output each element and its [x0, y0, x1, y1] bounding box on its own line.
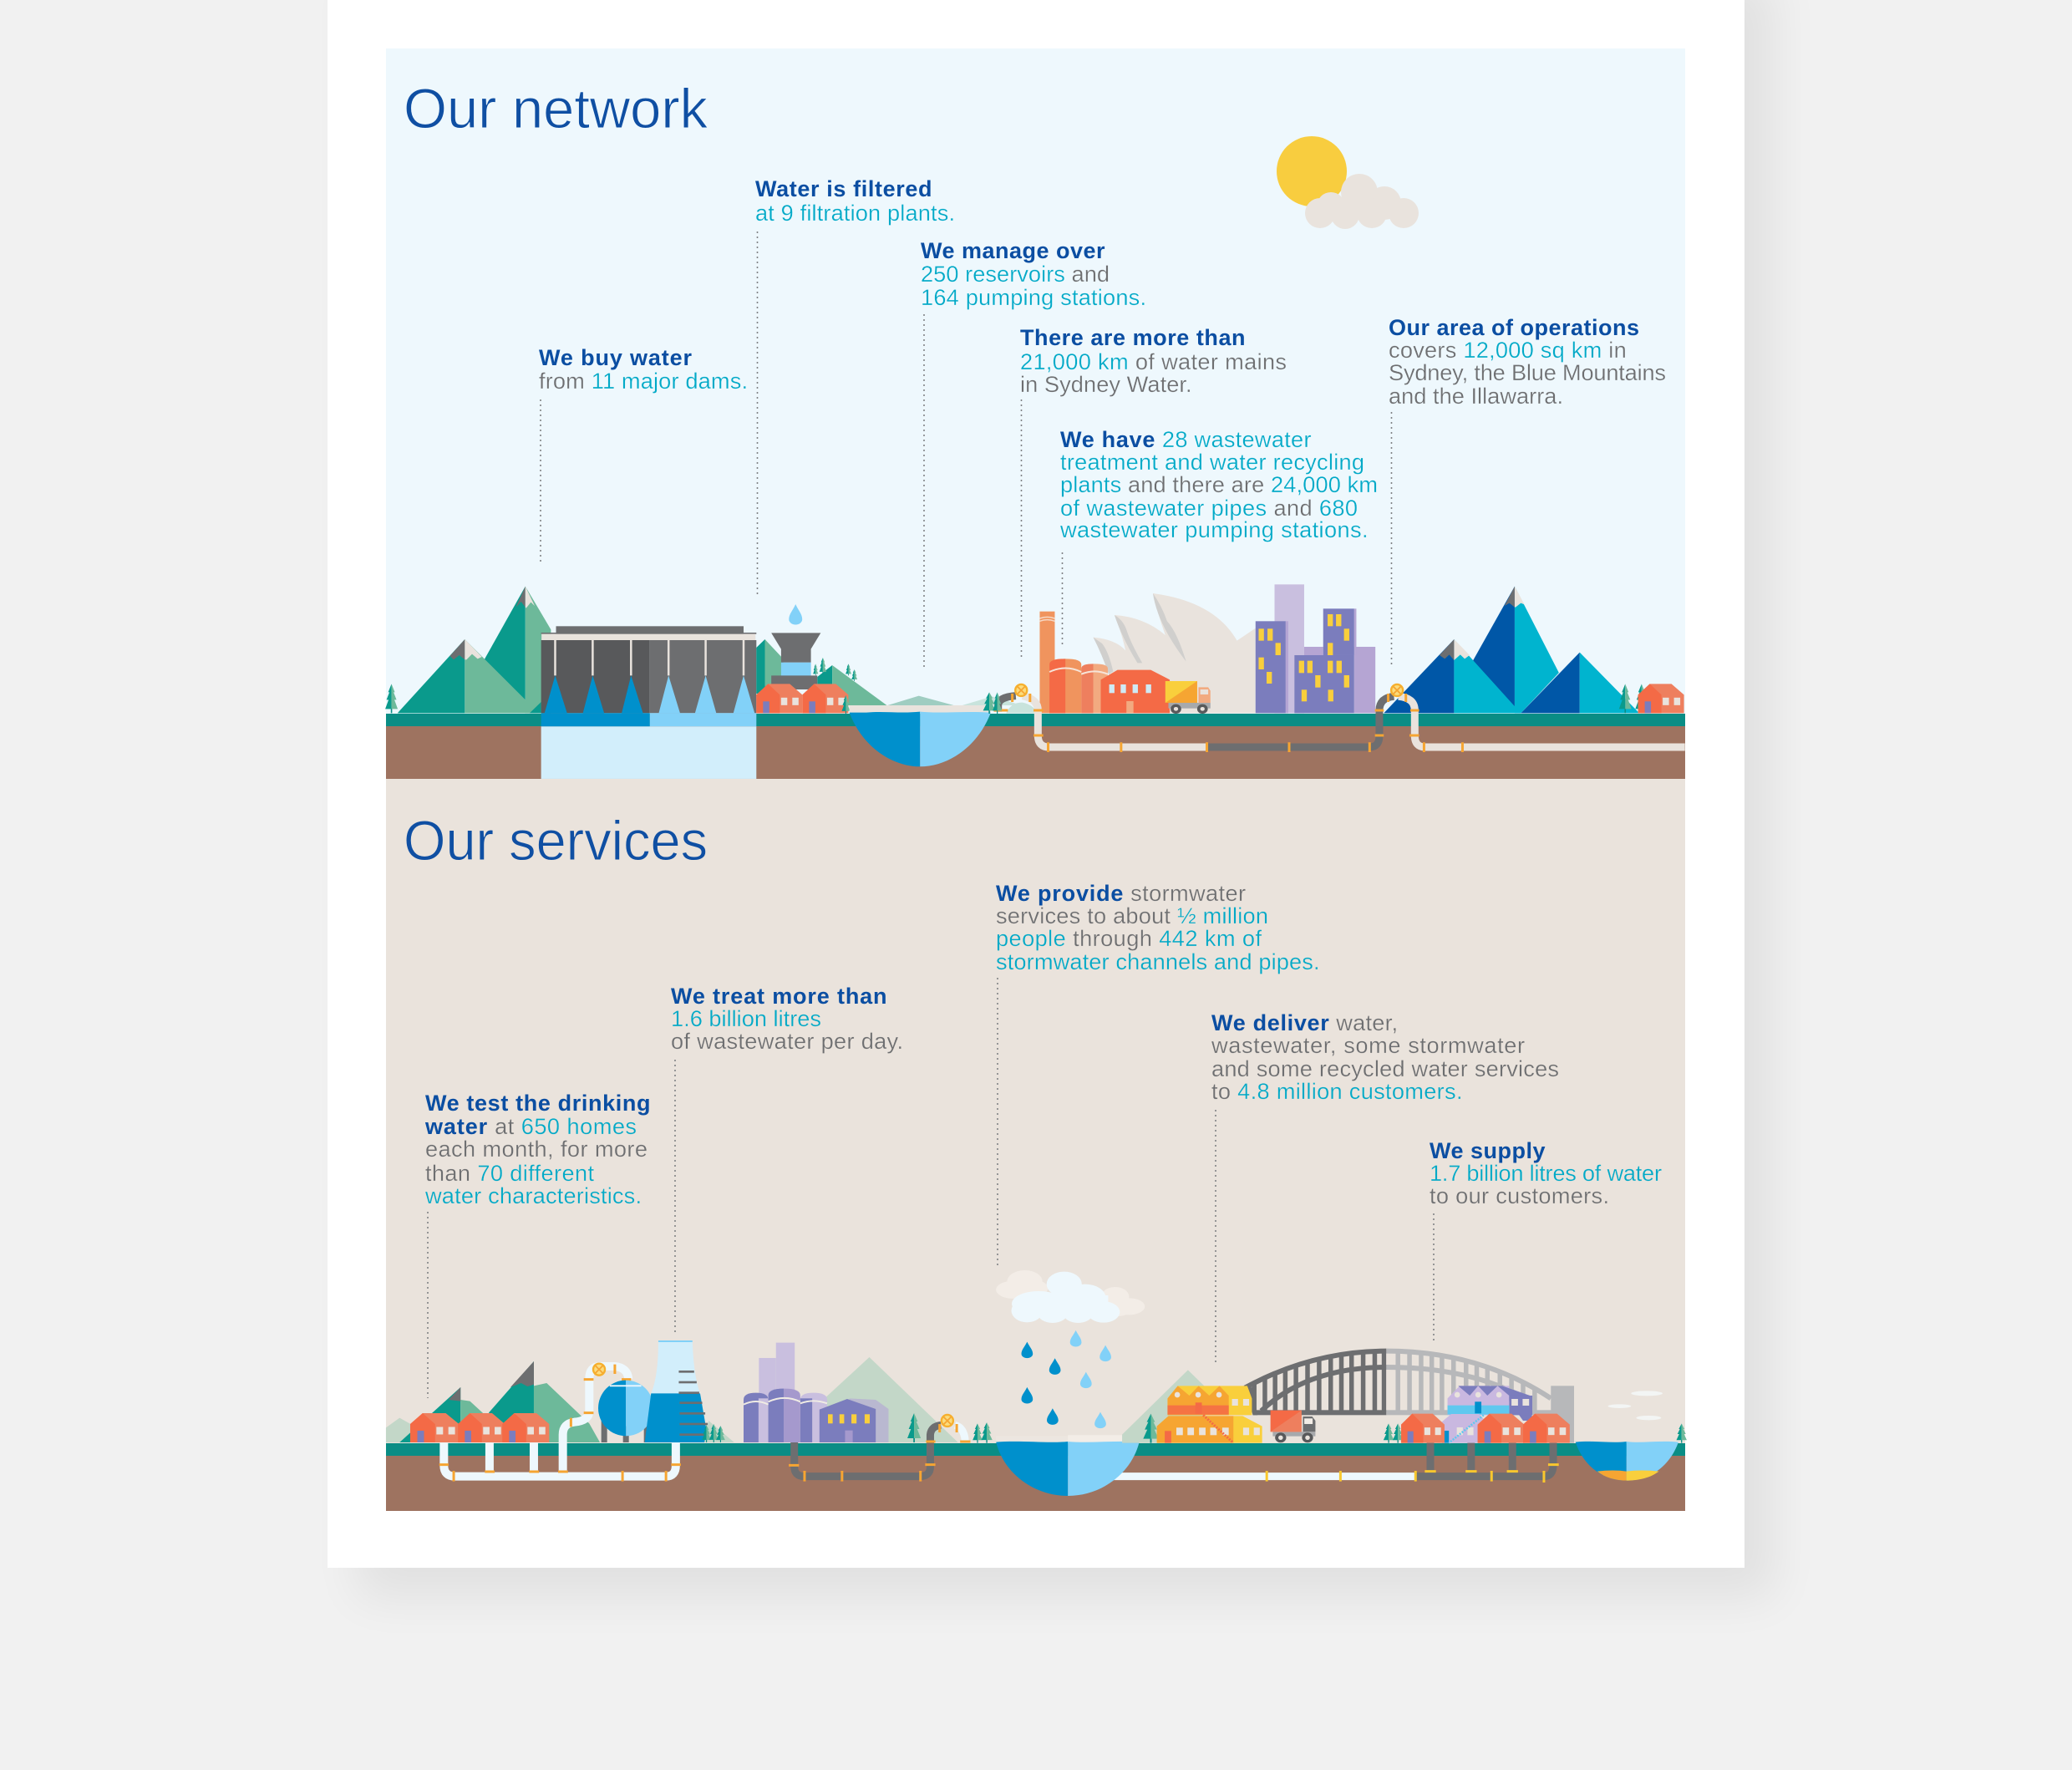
- text: we test: each month, for more: [425, 1136, 648, 1162]
- text: we deliver: to 4.8 million customers.: [1211, 1078, 1462, 1104]
- pipes: supply: [1267, 1443, 1559, 1483]
- ground: network: [386, 714, 1685, 779]
- leader: we test: [427, 1212, 429, 1398]
- leader: we treat: [674, 1060, 676, 1335]
- red truck: [1271, 1411, 1315, 1442]
- text: we deliver: We deliver water,: [1211, 1010, 1398, 1035]
- text: wastewater: of wastewater pipes and 680: [1060, 495, 1358, 521]
- text: we test: We test the drinking: [425, 1091, 651, 1116]
- text: we supply: 1.7 billion litres of water: [1430, 1160, 1662, 1186]
- text: wastewater: [1059, 426, 1378, 542]
- yellow terraces: [1157, 1386, 1262, 1443]
- text: we treat: of wastewater per day.: [671, 1028, 903, 1054]
- text: water mains: [1020, 325, 1287, 397]
- ground: services: [386, 1443, 1685, 1511]
- text: we treat: [671, 984, 903, 1054]
- text: water is filtered: at 9 filtration plants.: [755, 200, 955, 226]
- text: we treat: We treat more than: [671, 984, 887, 1009]
- text: area of operations: Our area of operations: [1389, 315, 1639, 340]
- text: we provide: services to about ½ million: [996, 903, 1268, 928]
- panel: our network: [385, 48, 1685, 779]
- text: we manage over: [921, 238, 1146, 310]
- text: we manage over: We manage over: [921, 238, 1105, 263]
- leader: we provide: [997, 978, 998, 1266]
- scene: dam and filtration (left half): [385, 587, 1022, 779]
- buildings: [1256, 584, 1375, 713]
- text: water is filtered: [755, 176, 955, 226]
- text: wastewater: treatment and water recycling: [1060, 449, 1364, 475]
- text: water mains: 21,000 km of water mains: [1020, 348, 1287, 374]
- text: area of operations: covers 12,000 sq km in: [1389, 337, 1627, 363]
- text: we test: water characteristics.: [424, 1183, 642, 1208]
- text: we supply: We supply: [1430, 1138, 1546, 1163]
- leader: we deliver: [1215, 1110, 1216, 1366]
- text: we manage over: 250 reservoirs and: [921, 261, 1110, 287]
- text: we deliver: and some recycled water services: [1211, 1055, 1559, 1081]
- leader: we buy water: [540, 399, 541, 564]
- leader: wastewater: [1061, 552, 1063, 648]
- clouds: distant: [1608, 1391, 1663, 1420]
- text: we provide: stormwater channels and pipes.: [996, 949, 1320, 974]
- leader: we manage over: [923, 314, 925, 670]
- text: we buy water: [539, 345, 748, 394]
- text: wastewater: wastewater pumping stations.: [1059, 516, 1369, 542]
- pale mountain: [1122, 1370, 1206, 1443]
- opera house: [1094, 593, 1256, 713]
- stormwater reservoir: [973, 1422, 1140, 1496]
- text: we provide: We provide stormwater: [996, 880, 1246, 906]
- purple treatment plant: [744, 1343, 958, 1442]
- text: water mains: There are more than: [1020, 325, 1246, 350]
- text: area of operations: Sydney, the Blue Mountains: [1389, 359, 1666, 385]
- homes: [1384, 1386, 1570, 1443]
- pipes: wastewater: [789, 1413, 970, 1482]
- text: we test: water at 650 homes: [424, 1113, 637, 1139]
- heading: our services: Our services: [404, 811, 708, 872]
- text: area of operations: and the Illawarra.: [1389, 383, 1563, 409]
- mountains: blue: [1384, 587, 1684, 713]
- tank: [598, 1381, 653, 1442]
- text: we supply: to our customers.: [1430, 1183, 1609, 1208]
- icon: valve: [942, 1415, 953, 1427]
- filtration tower: [756, 604, 886, 714]
- text: we test: than 70 different: [425, 1160, 594, 1186]
- text: we test: [424, 1091, 651, 1208]
- reservoir: [850, 696, 1022, 766]
- text: we manage over: 164 pumping stations.: [921, 284, 1146, 310]
- text: wastewater: We have 28 wastewater: [1060, 426, 1312, 452]
- panel: our services: [386, 779, 1687, 1511]
- rain cloud: [996, 1270, 1145, 1323]
- leader: we supply: [1433, 1213, 1435, 1341]
- heading: our network: Our network: [404, 79, 708, 140]
- text: wastewater: plants and there are 24,000 km: [1060, 471, 1378, 497]
- text: water is filtered: Water is filtered: [755, 176, 932, 201]
- text: we provide: [996, 880, 1320, 974]
- supply reservoir: [1576, 1423, 1687, 1481]
- leader: area of operations: [1390, 412, 1392, 664]
- scene: stormwater, bridge and supply (right half): [973, 1270, 1687, 1496]
- leader: water mains: [1021, 399, 1023, 657]
- text: we treat: 1.6 billion litres: [671, 1005, 821, 1031]
- scene: testing and treatment (left half): [386, 1340, 970, 1482]
- bridge: [1245, 1350, 1574, 1443]
- white pipe to reservoir: [1108, 1472, 1416, 1480]
- truck: [1166, 681, 1211, 714]
- pale hill near valve: [1006, 703, 1037, 713]
- icon: sun and cloud: [1277, 136, 1419, 229]
- text: we deliver: wastewater, some stormwater: [1211, 1032, 1525, 1058]
- text: we provide: people through 442 km of: [996, 925, 1262, 951]
- raindrops: [1021, 1330, 1111, 1428]
- cooling tower: [645, 1340, 734, 1442]
- icon: water drop: [789, 604, 802, 624]
- mountains and homes: [386, 1361, 600, 1442]
- pipes: network: [993, 684, 1685, 752]
- text: water mains: in Sydney Water.: [1020, 371, 1192, 397]
- text: area of operations: [1389, 315, 1666, 409]
- pipes: treated water: [439, 1364, 681, 1482]
- scene: city and pipes (right half): [983, 584, 1685, 752]
- text: we buy water: from 11 major dams.: [539, 368, 748, 394]
- text: we supply: [1430, 1138, 1662, 1208]
- mountains: green: [385, 587, 551, 713]
- dam: [541, 626, 756, 779]
- icon: valves: [1015, 684, 1403, 696]
- text: we buy water: We buy water: [539, 345, 693, 370]
- icon: valve: [593, 1364, 605, 1376]
- factory: [1039, 612, 1170, 713]
- leader: water is filtered: [757, 231, 759, 595]
- text: we deliver: [1211, 1010, 1559, 1104]
